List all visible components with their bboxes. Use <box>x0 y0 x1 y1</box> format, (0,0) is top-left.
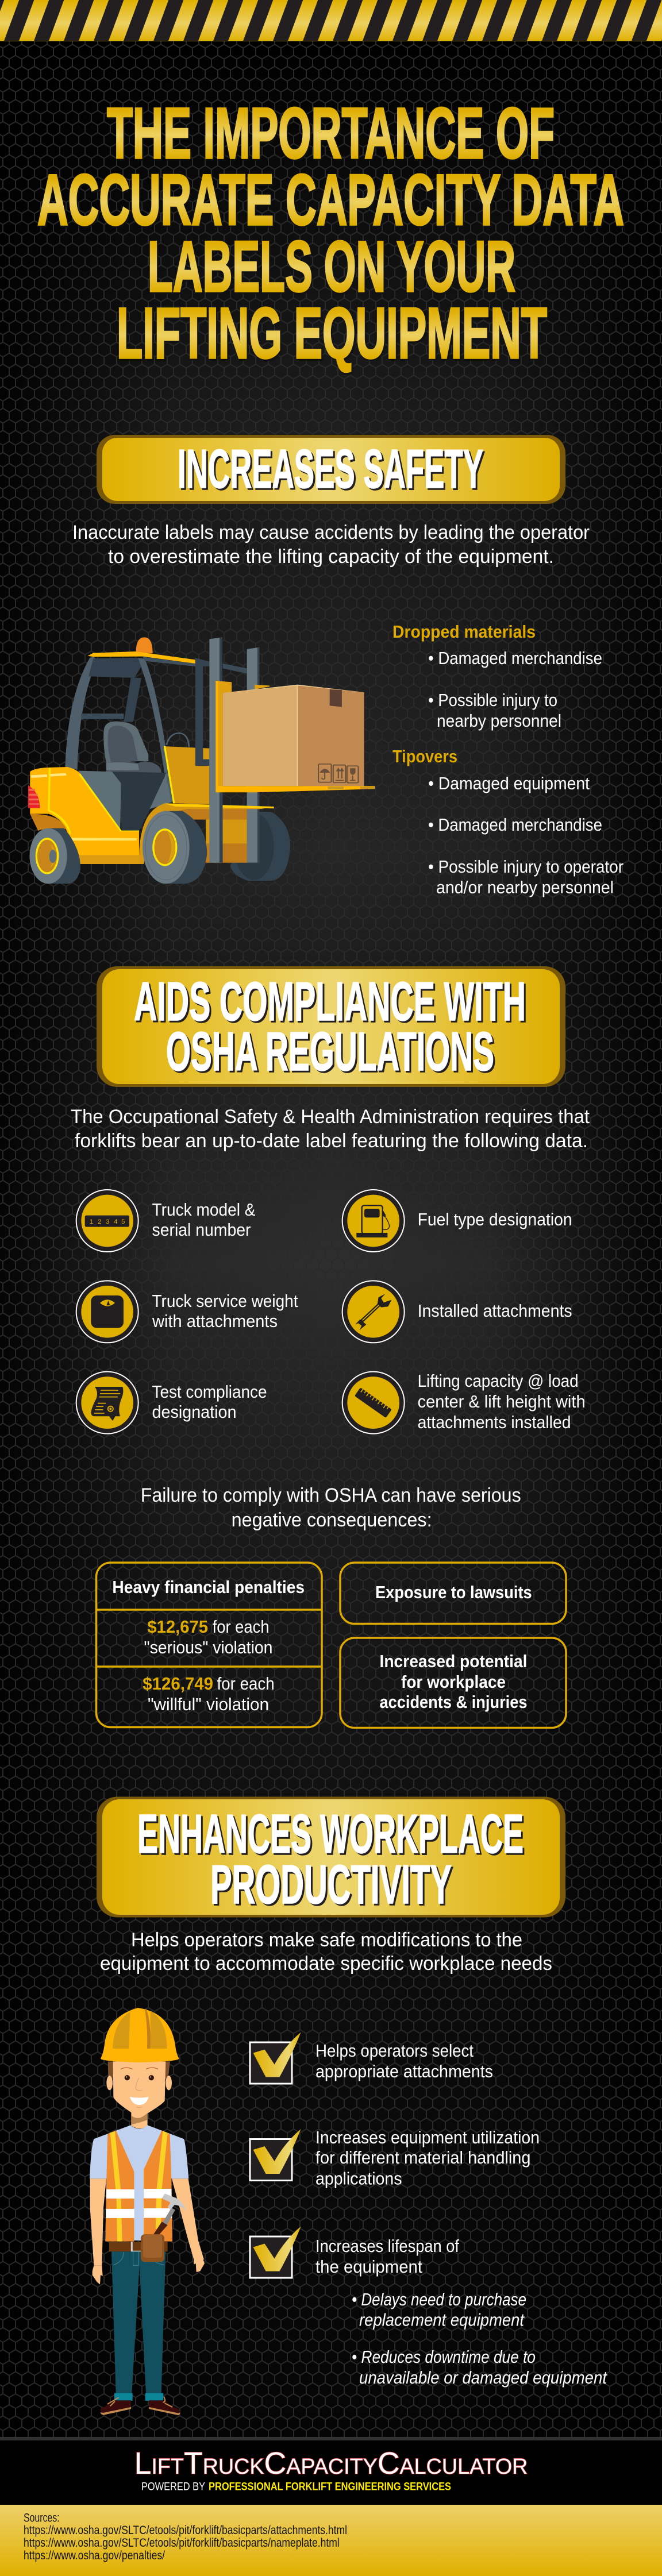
icon: wrench <box>342 1281 405 1343</box>
icon: serial number: 5 <box>121 1218 125 1225</box>
panel: heavy financial penalties: $12,675 <box>147 1617 208 1637</box>
intro text: OSHA: forklifts bear an up-to-date label featuring the following data. <box>75 1130 588 1152</box>
intro text: safety: Inaccurate labels may cause accidents by leading the operator <box>72 522 590 543</box>
section heading banner: OSHA compliance <box>97 966 565 1087</box>
label: truck model: serial number <box>152 1220 251 1240</box>
intro text: productivity: equipment to accommodate specific workplace needs <box>100 1953 552 1975</box>
label: installed attachments: Installed attachments <box>418 1301 572 1321</box>
checkbox 2 <box>250 2129 301 2181</box>
text: lifespan details: • Delays need to purchase <box>352 2289 526 2309</box>
panel: heavy financial penalties <box>97 1563 322 1727</box>
panel: heavy financial penalties: "serious" violation <box>144 1637 272 1657</box>
footer: sources <box>0 2505 662 2576</box>
text: equipment utilization <box>315 2127 540 2189</box>
text: equipment utilization: Increases equipment utilization <box>315 2127 540 2147</box>
section heading banner: workplace productivity: PRODUCTIVITY <box>210 1854 452 1915</box>
icon: ruler <box>342 1372 405 1434</box>
label: truck model <box>152 1200 256 1240</box>
panel: increased potential for accidents: Increased potential <box>379 1651 528 1671</box>
footer: logo band: LiftTruckCapacityCalculator <box>134 2446 528 2481</box>
label: fuel type: Fuel type designation <box>418 1209 572 1229</box>
text: select attachments <box>315 2041 493 2081</box>
text: select attachments: appropriate attachments <box>315 2061 493 2081</box>
panel: exposure to lawsuits: Exposure to lawsuits <box>375 1582 532 1602</box>
panel: heavy financial penalties: $126,749 <box>143 1673 213 1694</box>
label: truck service weight: Truck service weight <box>152 1291 298 1311</box>
text: consequences intro: Failure to comply with OSHA can have serious <box>141 1484 521 1506</box>
text: lifespan: Increases lifespan of <box>315 2236 459 2256</box>
label: test compliance: Test compliance <box>152 1382 267 1402</box>
panel: increased potential for accidents <box>340 1638 566 1728</box>
panel: heavy financial penalties: "willful" violation <box>148 1694 269 1714</box>
text: lifespan details: unavailable or damaged equipment <box>359 2367 607 2388</box>
checkbox 1 <box>250 2033 301 2084</box>
icon: serial number: 4 <box>114 1218 117 1225</box>
hazard stripe band <box>0 0 662 41</box>
icon: serial number <box>76 1190 138 1252</box>
label: lifting capacity: Lifting capacity @ load <box>418 1371 579 1391</box>
list: risks of inaccurate labels: • Possible injury to <box>428 690 557 710</box>
footer: logo band: PROFESSIONAL FORKLIFT ENGINEERING SERVICES <box>209 2481 451 2493</box>
label: lifting capacity: attachments installed <box>418 1412 571 1432</box>
illustration: construction worker <box>90 2008 205 2415</box>
title <box>37 94 624 373</box>
panel: heavy financial penalties: for each <box>213 1617 270 1637</box>
label: test compliance: designation <box>152 1402 237 1422</box>
list: risks of inaccurate labels: • Damaged equipment <box>428 773 590 793</box>
section heading banner: increases safety <box>97 435 565 504</box>
illustration: forklift with box <box>28 637 375 884</box>
section heading banner: workplace productivity <box>97 1797 565 1918</box>
text: lifespan details: • Reduces downtime due to <box>352 2347 536 2367</box>
intro text: productivity <box>100 1929 552 1975</box>
intro text: safety: to overestimate the lifting capacity of the equipment. <box>108 546 554 568</box>
list: risks of inaccurate labels <box>392 622 623 897</box>
footer: sources: https://www.osha.gov/SLTC/etools/pit/forklift/basicparts/nameplate.html <box>24 2536 340 2550</box>
text: lifespan details <box>352 2289 607 2388</box>
list: risks of inaccurate labels: • Damaged merchandise <box>428 648 602 668</box>
text: lifespan <box>315 2236 459 2277</box>
panel: heavy financial penalties: Heavy financial penalties <box>112 1577 305 1597</box>
intro text: safety <box>72 522 590 568</box>
icon: weight scale <box>76 1281 138 1343</box>
intro text: OSHA <box>71 1106 590 1152</box>
panel: exposure to lawsuits <box>340 1563 566 1624</box>
label: lifting capacity <box>418 1371 586 1432</box>
footer: sources: https://www.osha.gov/SLTC/etools/pit/forklift/basicparts/attachments.html <box>24 2523 347 2537</box>
list: risks of inaccurate labels: • Damaged merchandise <box>428 815 602 835</box>
list: risks of inaccurate labels: • Possible injury to operator <box>428 857 623 877</box>
text: lifespan: the equipment <box>315 2257 422 2277</box>
list: risks of inaccurate labels: and/or nearby personnel <box>436 877 614 897</box>
list: risks of inaccurate labels: nearby personnel <box>437 711 561 731</box>
icon: serial number: 2 <box>98 1218 101 1225</box>
footer: sources: Sources: <box>24 2511 60 2524</box>
panel: increased potential for accidents: for workplace <box>401 1672 506 1692</box>
label: lifting capacity: center & lift height with <box>418 1391 586 1412</box>
icon: serial number: 1 <box>90 1218 93 1225</box>
intro text: OSHA: The Occupational Safety & Health Administration requires that <box>71 1106 590 1128</box>
text: lifespan details: replacement equipment <box>359 2309 525 2330</box>
footer: sources: https://www.osha.gov/penalties/ <box>24 2548 165 2562</box>
text: consequences intro: negative consequences: <box>232 1509 432 1531</box>
footer: logo band <box>0 2437 662 2505</box>
label: test compliance <box>152 1382 267 1422</box>
icon: certificate <box>76 1372 138 1434</box>
heading: dropped materials: Dropped materials <box>392 622 536 642</box>
icon: serial number: 3 <box>106 1218 109 1225</box>
panel: heavy financial penalties: for each <box>217 1673 275 1694</box>
text: consequences intro <box>141 1484 521 1531</box>
icon: fuel pump <box>342 1190 405 1252</box>
text: equipment utilization: applications <box>315 2168 402 2189</box>
checkbox 3 <box>250 2227 301 2278</box>
panel: increased potential for accidents: accidents & injuries <box>379 1692 528 1712</box>
label: truck service weight <box>152 1291 298 1331</box>
label: truck service weight: with attachments <box>152 1311 278 1331</box>
label: truck model: Truck model & <box>152 1200 256 1220</box>
text: select attachments: Helps operators select <box>315 2041 474 2061</box>
text: equipment utilization: for different material handling <box>315 2147 531 2168</box>
heading: tipovers: Tipovers <box>392 746 457 766</box>
intro text: productivity: Helps operators make safe modifications to the <box>131 1929 522 1951</box>
footer: logo band: POWERED BY <box>141 2481 205 2493</box>
